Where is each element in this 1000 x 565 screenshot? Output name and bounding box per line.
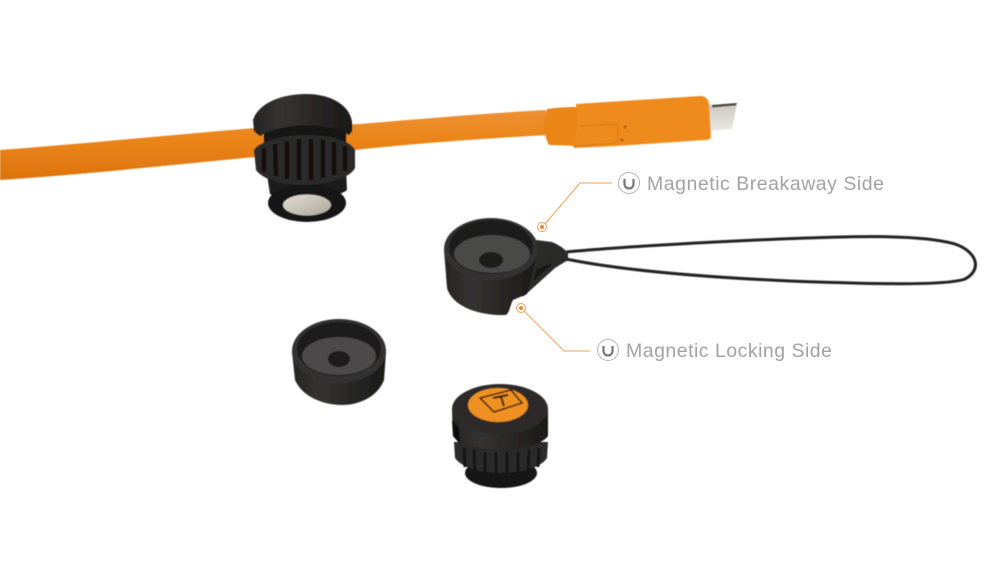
orange cable (0, 110, 546, 180)
breakaway tether cup (444, 218, 568, 315)
clamp on cable (253, 94, 355, 222)
label: Magnetic Breakaway Side (647, 173, 884, 195)
callout: magnetic breakaway side (538, 172, 884, 232)
floor (302, 337, 376, 375)
metal plug (708, 103, 737, 131)
icon: magnet (618, 172, 640, 194)
tether tab (500, 240, 568, 300)
knurled ring (454, 442, 548, 473)
top (452, 384, 548, 434)
leader line (523, 310, 590, 351)
cup rim (444, 218, 538, 280)
icon: magnet (598, 340, 618, 360)
orange badge (468, 388, 528, 422)
leader line (544, 183, 612, 225)
label: Magnetic Locking Side (626, 340, 832, 362)
cup floor (454, 235, 530, 273)
body (452, 410, 548, 450)
rim (292, 319, 386, 383)
knurled collar (254, 135, 355, 185)
button (328, 351, 350, 367)
top disc (253, 94, 352, 136)
lower flange (268, 184, 346, 222)
marker (516, 304, 526, 312)
cup wall (444, 250, 538, 315)
neck (266, 168, 347, 200)
metal face (283, 194, 331, 216)
connector collar (544, 107, 580, 146)
loose cup (292, 319, 386, 405)
slot (452, 420, 460, 444)
connector body (572, 96, 711, 148)
usb-c connector (544, 96, 737, 148)
logo (480, 390, 522, 412)
logo letter (493, 395, 508, 406)
base (465, 458, 537, 488)
callout: magnetic locking side (516, 304, 832, 362)
dark core (264, 125, 346, 155)
connector lower tab (574, 124, 618, 146)
wall (292, 352, 386, 405)
branded cap (452, 384, 548, 488)
marker (538, 222, 546, 232)
connector dots (624, 126, 626, 128)
lanyard cord (566, 237, 975, 284)
cup button (479, 252, 503, 268)
